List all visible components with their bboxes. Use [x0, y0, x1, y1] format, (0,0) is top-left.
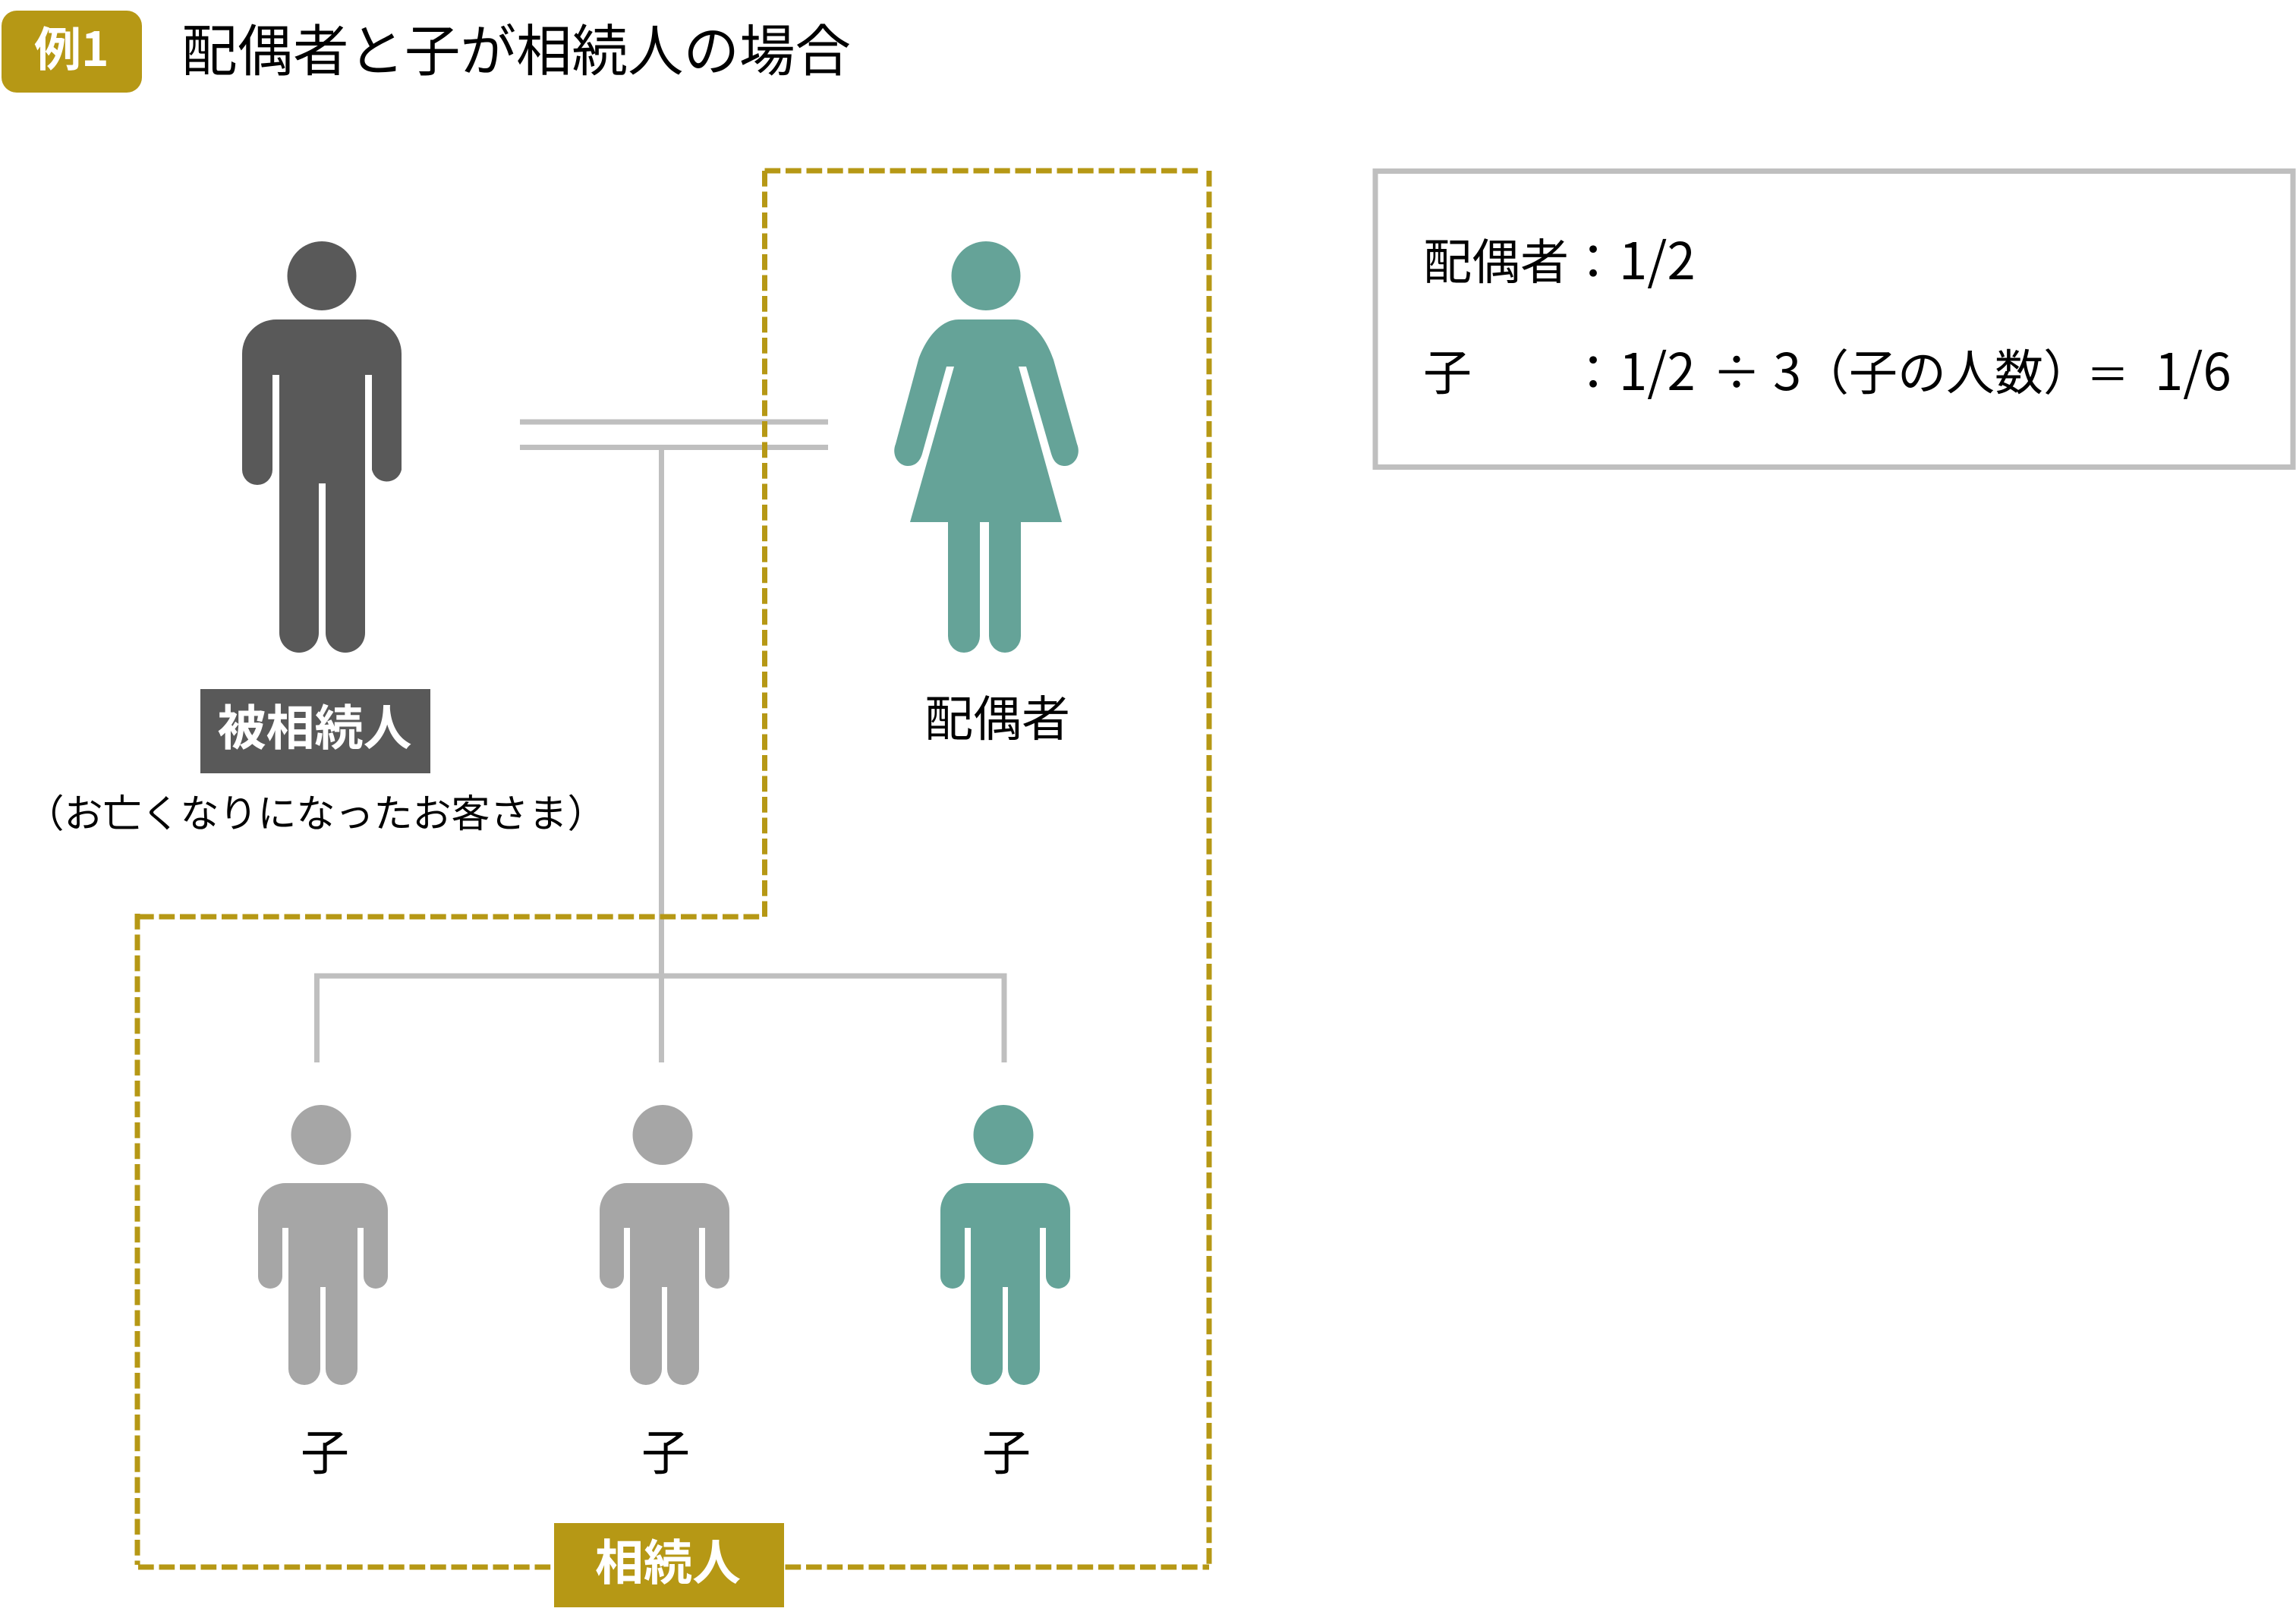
title badge — [2, 11, 142, 93]
label: child 1: 子 — [301, 1415, 349, 1484]
label: heirs: 相続人 — [595, 1525, 741, 1594]
spouse share: 1/2 — [1619, 221, 1696, 294]
title badge: 例1 — [34, 11, 109, 80]
title: 配偶者と子が相続人の場合 — [181, 7, 851, 87]
family tree connector lines — [317, 448, 1004, 1062]
label: child 2: 子 — [641, 1415, 690, 1484]
label: child 3: 子 — [982, 1415, 1031, 1484]
marriage double line — [520, 419, 828, 450]
child share: ÷ — [1712, 335, 1761, 404]
child share: （子の人数） — [1800, 335, 2092, 404]
child share: 3 — [1773, 332, 1801, 405]
label: heirs — [554, 1523, 784, 1607]
label: deceased: 被相続人 — [217, 690, 411, 760]
icon: deceased person — [242, 241, 402, 653]
icon: spouse — [894, 241, 1079, 653]
child share: 1/2 — [1619, 332, 1696, 405]
heirs dashed boundary — [137, 171, 1209, 1567]
icon: child 1 — [258, 1105, 388, 1385]
child share: ： — [1569, 335, 1617, 404]
spouse share: 配偶者： — [1423, 224, 1617, 294]
child share: 1/6 — [2155, 332, 2231, 405]
label: spouse: 配偶者 — [924, 681, 1070, 751]
icon: child 2 — [600, 1105, 729, 1385]
caption: deceased customer: （お亡くなりになったお客さま） — [26, 782, 606, 839]
child share: 子 — [1423, 335, 1472, 404]
child share: ＝ — [2087, 341, 2129, 403]
panel: inheritance shares — [1375, 172, 2293, 467]
icon: child 3 — [940, 1105, 1070, 1385]
